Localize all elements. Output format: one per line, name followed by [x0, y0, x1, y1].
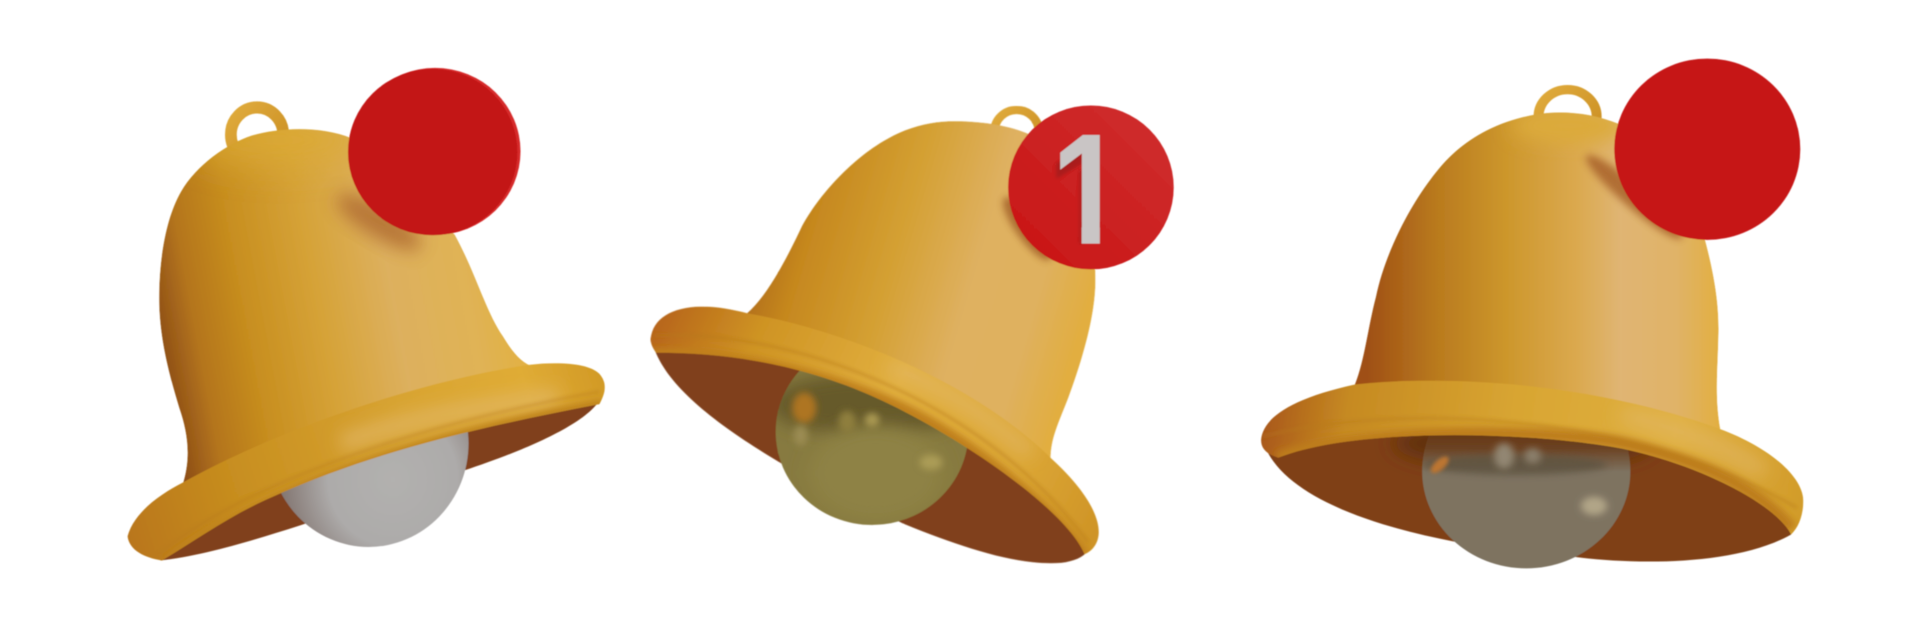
- bell 1 hanging ring: [231, 107, 283, 162]
- bell 1 badge shadow: [330, 184, 428, 260]
- bell 3 clapper: [1422, 436, 1631, 570]
- bell 2 body: [747, 121, 1095, 460]
- bell 3 inner dark mouth: [1267, 397, 1791, 562]
- bell 2 badge shadow: [1000, 194, 1052, 264]
- bell 1 body: [159, 115, 530, 490]
- bell 1 clapper: [269, 340, 469, 547]
- bell 1 inner dark mouth: [160, 397, 599, 561]
- bell 2 numeral shadow: [1056, 150, 1083, 244]
- bell 2 hanging ring: [995, 110, 1039, 153]
- bell 3: plain red badge: [1255, 59, 1810, 572]
- bell 3 brim: [1260, 380, 1804, 535]
- bell 3 red badge: [1614, 59, 1800, 240]
- bell 2 inner dark mouth: [653, 336, 1088, 563]
- bell 2 red badge: [1008, 101, 1174, 277]
- notification bells illustration: [126, 58, 1804, 570]
- bell 2: badge with number one: [647, 101, 1174, 563]
- bell 3 hanging ring: [1539, 90, 1597, 144]
- bell 2 badge numeral: 1: [1051, 101, 1124, 277]
- bell 1 brim: [121, 354, 610, 568]
- bell 3 body: [1355, 108, 1720, 429]
- bell 2 brim: [647, 301, 1104, 559]
- bell 3 badge shadow: [1583, 152, 1685, 242]
- bell 1: plain red badge: [121, 68, 610, 568]
- bell 2 clapper: [775, 370, 968, 526]
- bell 1 red badge: [348, 68, 521, 235]
